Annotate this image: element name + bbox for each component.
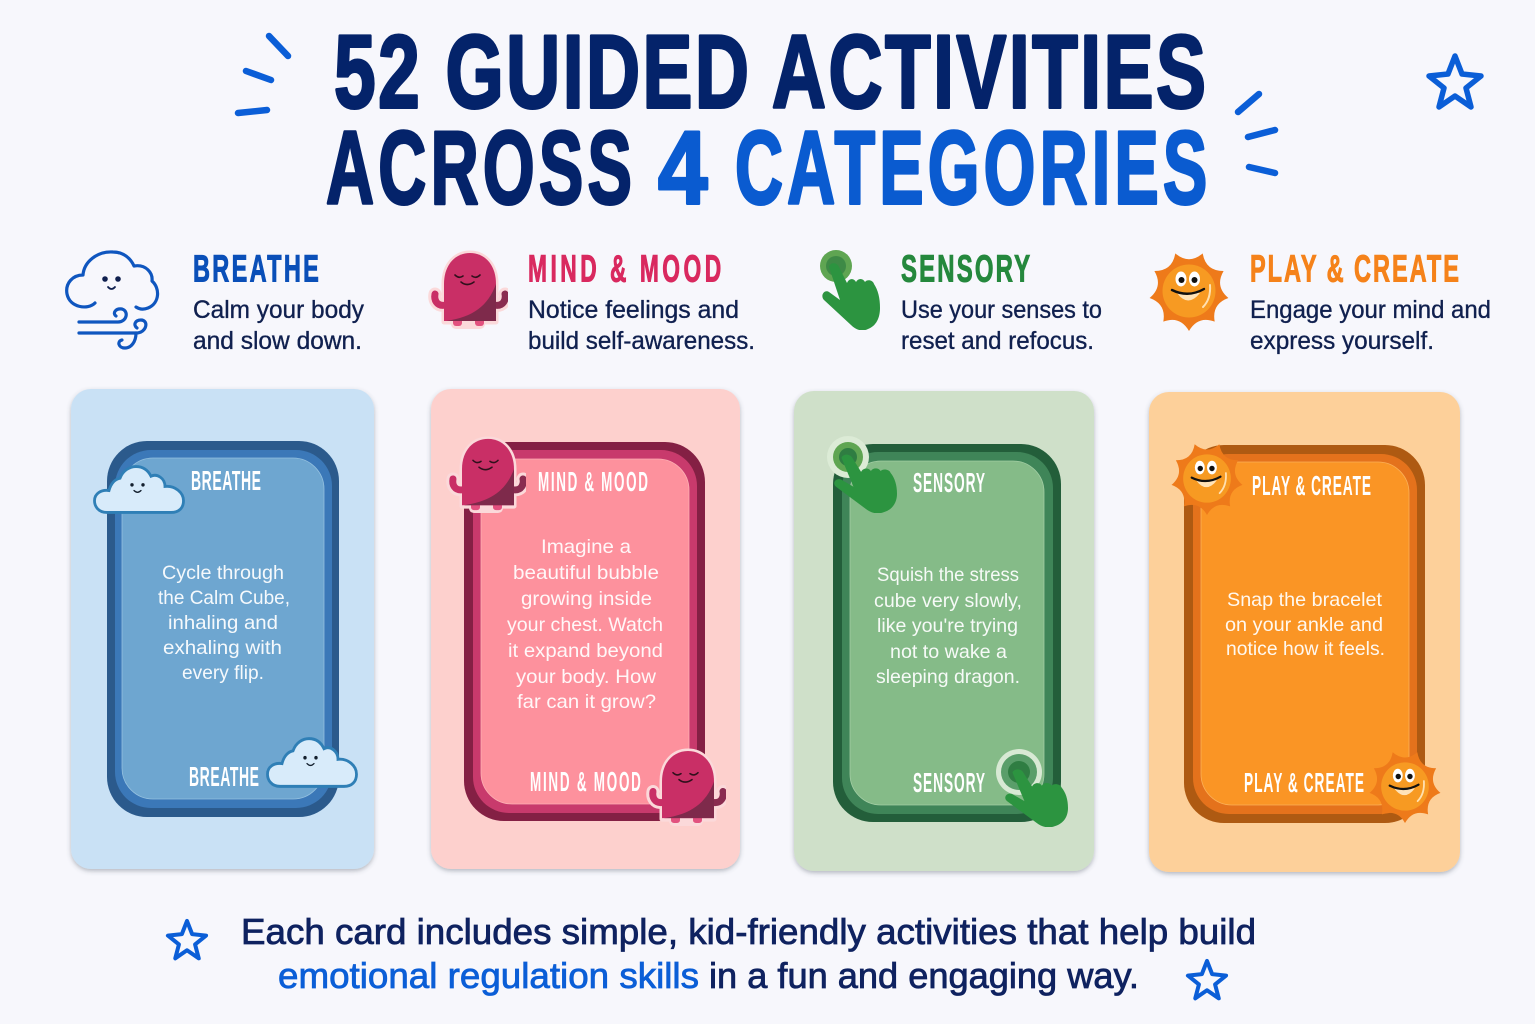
card activity text: Imagine a bbox=[541, 536, 631, 558]
description: Play and Create: express yourself. bbox=[1250, 327, 1434, 355]
description: Mind and Mood: Notice feelings and bbox=[528, 296, 739, 324]
description: Breathe: Calm your body bbox=[193, 296, 364, 324]
card activity text: beautiful bubble bbox=[513, 562, 659, 584]
card activity text: your chest. Watch bbox=[507, 614, 663, 636]
card label: top: SENSORY bbox=[913, 467, 985, 498]
description: Mind and Mood: build self-awareness. bbox=[528, 327, 755, 355]
description: Sensory bbox=[901, 296, 1102, 355]
title: 4 bbox=[658, 110, 708, 226]
heading: Mind and Mood: MIND & MOOD bbox=[528, 248, 721, 290]
card activity text: Squish the stress bbox=[877, 564, 1019, 586]
footer text: in a fun and engaging way. bbox=[709, 955, 1139, 996]
card activity text: the Calm Cube, bbox=[158, 587, 290, 609]
icon: hand bottom bbox=[996, 749, 1068, 827]
card activity text: inhaling and bbox=[168, 612, 278, 634]
card activity text: your body. How bbox=[516, 666, 657, 688]
card activity text: Snap the bracelet bbox=[1227, 589, 1383, 611]
title bbox=[326, 15, 1207, 226]
card label: top: BREATHE bbox=[191, 465, 261, 496]
panel: Breathe card bbox=[71, 389, 374, 869]
heading: Sensory: SENSORY bbox=[901, 247, 1030, 290]
icon: smiling sun bbox=[1150, 253, 1228, 331]
card activity text bbox=[874, 564, 1022, 688]
card activity text: not to wake a bbox=[890, 641, 1007, 663]
icon: star bottom left bbox=[168, 921, 206, 958]
icon: left burst strokes bbox=[238, 36, 288, 113]
icon: cloud top bbox=[94, 467, 184, 512]
description: Mind and Mood bbox=[528, 296, 755, 355]
card activity text: sleeping dragon. bbox=[876, 666, 1020, 688]
category: Mind and Mood bbox=[435, 248, 755, 355]
card label: bottom: BREATHE bbox=[189, 761, 259, 792]
title: 52 GUIDED ACTIVITIES bbox=[334, 15, 1206, 130]
footer text: Each card includes simple, kid-friendly activities that help build bbox=[241, 911, 1256, 952]
panel: Play and Create card bbox=[1149, 392, 1460, 872]
icon: character bottom bbox=[653, 751, 723, 823]
icon: star bottom right bbox=[1188, 961, 1226, 998]
description: Breathe: and slow down. bbox=[193, 327, 362, 355]
icon: pointing hand bbox=[820, 250, 880, 330]
card label: bottom: SENSORY bbox=[913, 767, 985, 798]
card activity text: cube very slowly, bbox=[874, 590, 1022, 612]
category: Breathe bbox=[67, 247, 364, 355]
card activity text: Cycle through bbox=[162, 562, 284, 584]
description: Play and Create: Engage your mind and bbox=[1250, 296, 1491, 324]
description: Breathe bbox=[193, 296, 364, 355]
footer text bbox=[241, 911, 1256, 996]
card activity text: notice how it feels. bbox=[1226, 638, 1385, 660]
icon: hand top bbox=[827, 436, 897, 513]
card activity text: like you're trying bbox=[877, 615, 1018, 637]
description: Sensory: Use your senses to bbox=[901, 296, 1102, 324]
card activity text: exhaling with bbox=[163, 637, 282, 659]
card activity text bbox=[1225, 589, 1385, 660]
icon: sun top bbox=[1172, 444, 1242, 515]
icon: calm character bbox=[435, 253, 505, 326]
category: Play and Create bbox=[1150, 247, 1491, 355]
card label: bottom: PLAY & CREATE bbox=[1244, 767, 1364, 798]
icon: breathing cloud bbox=[67, 252, 158, 348]
heading: Breathe: BREATHE bbox=[193, 247, 319, 290]
panel: Sensory card bbox=[794, 391, 1094, 871]
icon: star top right bbox=[1429, 56, 1481, 107]
card label: bottom: MIND & MOOD bbox=[530, 766, 641, 797]
description: Play and Create bbox=[1250, 296, 1491, 355]
footer text: emotional regulation skills bbox=[278, 955, 699, 996]
icon: character top bbox=[453, 439, 523, 510]
title: ACROSS bbox=[326, 109, 632, 226]
card activity text bbox=[507, 536, 663, 713]
card label: top: PLAY & CREATE bbox=[1252, 470, 1371, 501]
description: Sensory: reset and refocus. bbox=[901, 327, 1094, 355]
panel: Mind and Mood card bbox=[431, 389, 740, 869]
card label: top: MIND & MOOD bbox=[538, 466, 648, 497]
card activity text: growing inside bbox=[521, 588, 652, 610]
title: CATEGORIES bbox=[735, 109, 1207, 226]
icon: cloud bottom bbox=[268, 739, 356, 786]
card activity text: it expand beyond bbox=[508, 640, 663, 662]
card activity text: every flip. bbox=[182, 662, 264, 684]
heading: Play and Create: PLAY & CREATE bbox=[1250, 247, 1459, 290]
icon: right burst strokes bbox=[1238, 94, 1275, 173]
card activity text bbox=[158, 562, 290, 684]
card activity text: far can it grow? bbox=[517, 691, 656, 713]
icon: sun bottom bbox=[1370, 752, 1440, 823]
card activity text: on your ankle and bbox=[1225, 614, 1383, 636]
category: Sensory bbox=[820, 247, 1102, 355]
